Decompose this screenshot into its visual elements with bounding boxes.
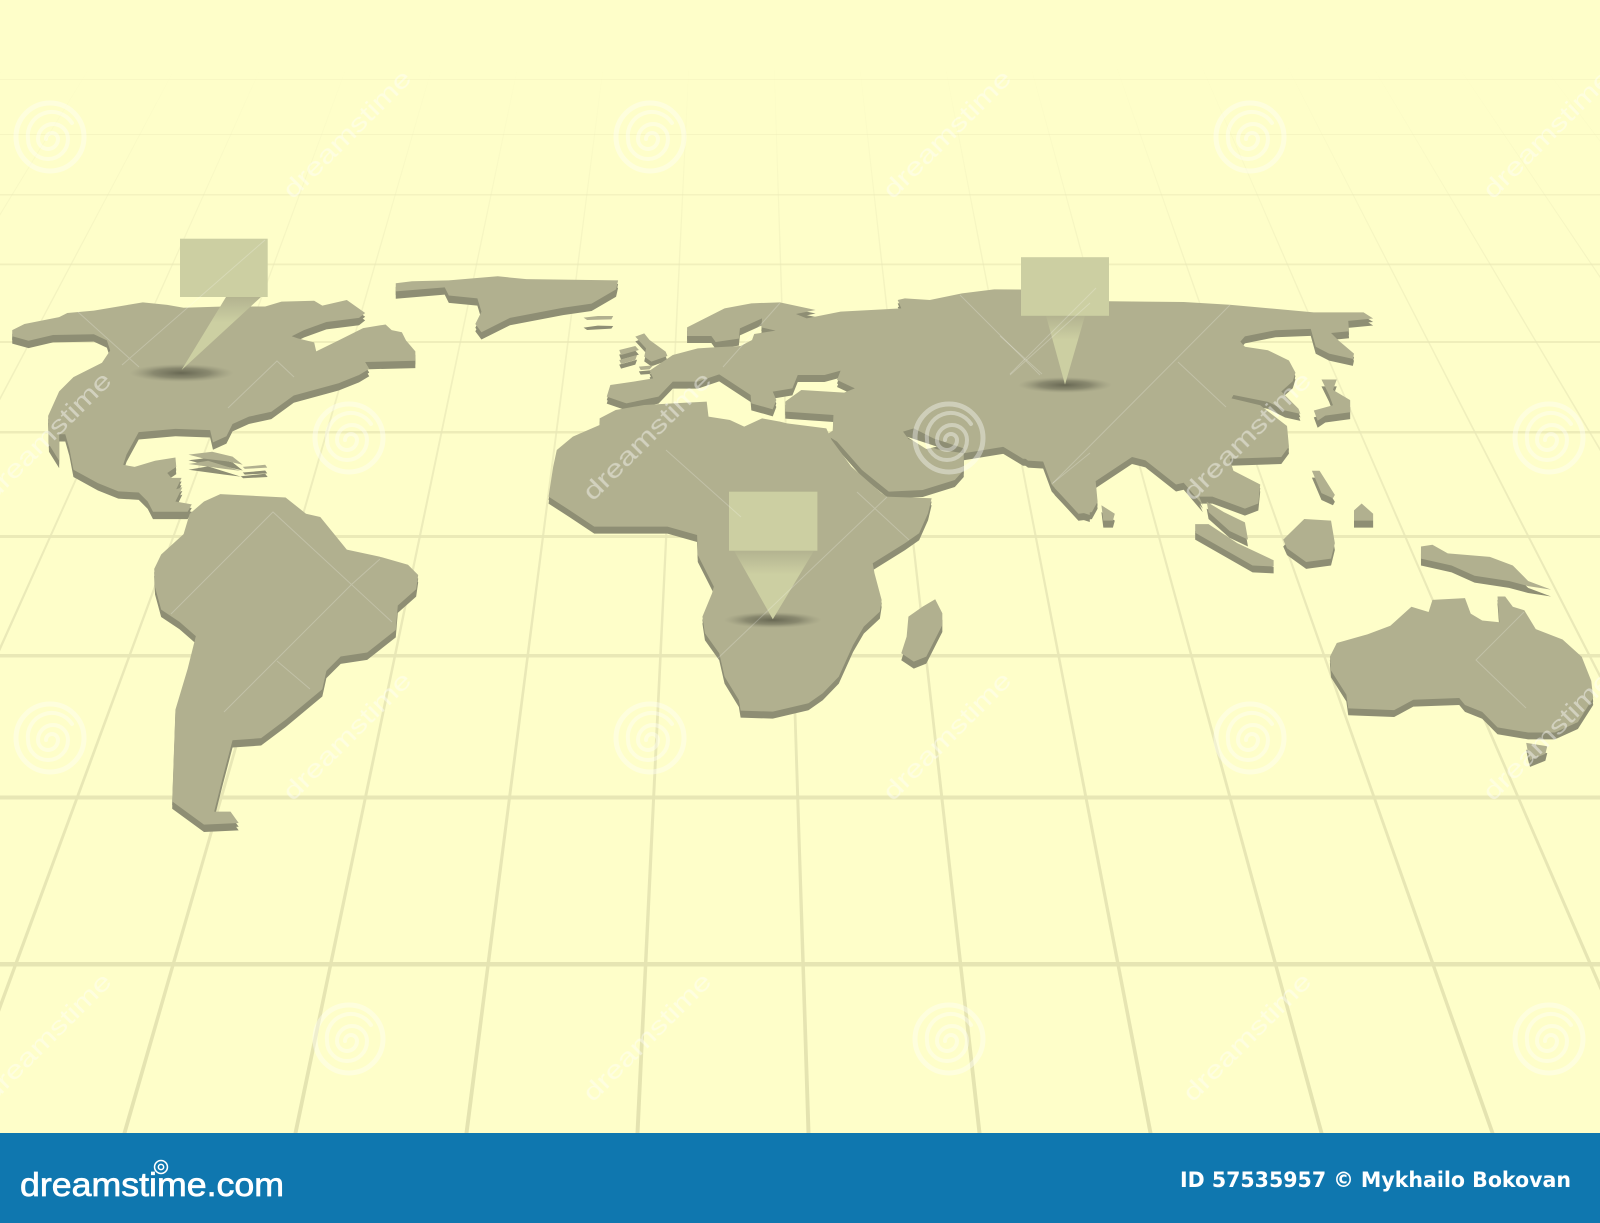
watermark spirals — [16, 103, 1583, 1073]
island: Tasmania — [1526, 743, 1547, 767]
pin: Africa — [724, 492, 822, 628]
continent: Eurasia — [607, 289, 1373, 522]
continent: South America — [154, 494, 418, 832]
islands: Britain and Ireland — [619, 333, 667, 375]
watermark text: dreamstime — [577, 967, 717, 1107]
watermark text: dreamstime — [1477, 666, 1600, 806]
watermark text: dreamstime — [577, 366, 717, 506]
footer banner — [0, 1133, 1600, 1223]
continent: North America — [12, 300, 415, 519]
watermark text: dreamstime — [277, 64, 417, 204]
continent: Greenland — [396, 276, 618, 340]
pin: North America — [130, 239, 268, 382]
islands: Iceland — [584, 316, 613, 330]
islands: Southeast Asia and Japan — [1101, 379, 1373, 573]
banner logo spiral — [155, 1161, 167, 1173]
watermark text: dreamstime — [1177, 366, 1317, 506]
watermark text: dreamstime — [877, 666, 1017, 806]
watermark crossing lines — [78, 240, 1526, 712]
island: New Guinea — [1421, 545, 1551, 596]
island: Madagascar — [901, 599, 942, 669]
continent: Africa — [549, 402, 932, 719]
banner logo: dreamstime.com — [20, 1166, 284, 1203]
watermark text: dreamstime — [1177, 967, 1317, 1107]
watermark text: dreamstime — [1477, 64, 1600, 204]
image credit: ID 57535957 © Mykhailo Bokovan — [1180, 1168, 1571, 1192]
continent: Australia — [1330, 596, 1593, 739]
Caribbean islands — [188, 452, 268, 478]
pin: Russia — [1018, 257, 1112, 393]
watermark text: dreamstime — [877, 64, 1017, 204]
watermark text: dreamstime — [277, 666, 417, 806]
